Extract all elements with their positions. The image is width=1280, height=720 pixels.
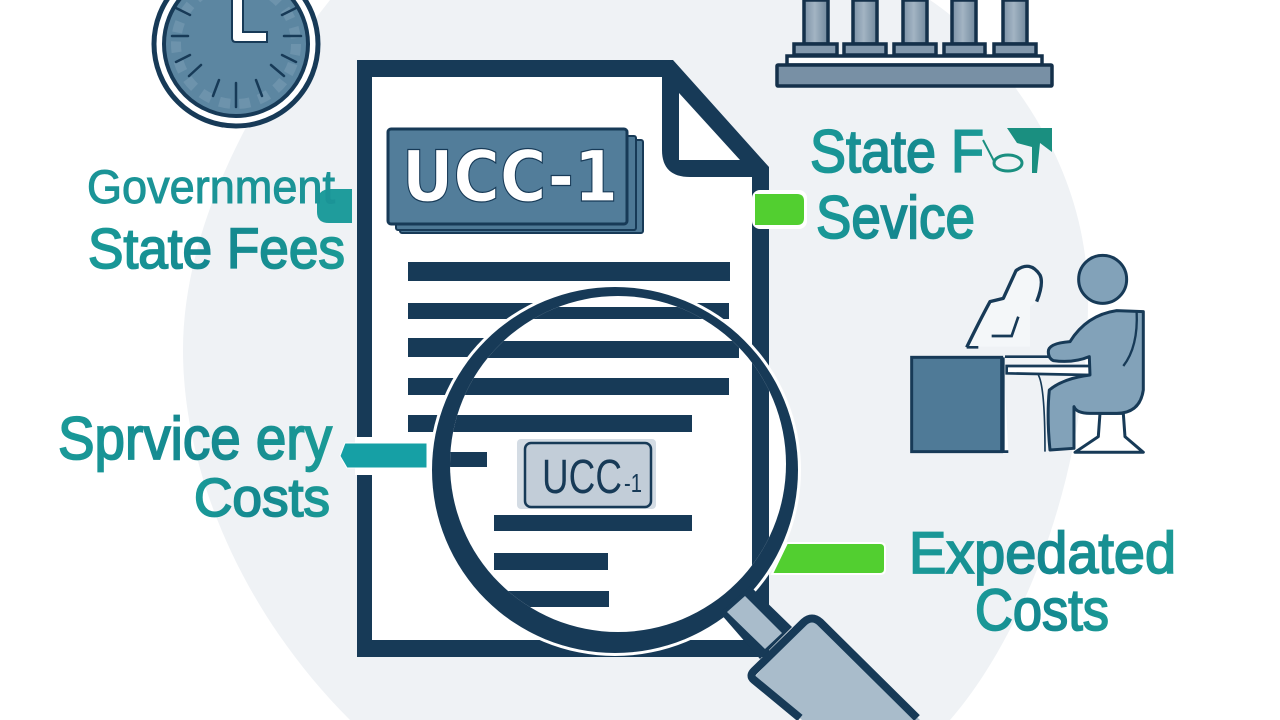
label: service costs bbox=[58, 405, 332, 528]
label: state service: State F bbox=[810, 118, 984, 185]
label: government state fees: State Fees bbox=[88, 217, 345, 281]
label: service costs: Costs bbox=[194, 468, 330, 528]
label: expedited costs bbox=[909, 521, 1176, 643]
handle neck bbox=[720, 586, 792, 659]
mini UCC-1 label bbox=[517, 439, 656, 509]
label: service costs: Sprvice ery bbox=[58, 405, 332, 472]
UCC-1 badge: UCC-1 bbox=[402, 136, 618, 218]
lens content bbox=[450, 307, 769, 607]
icon: courthouse columns bbox=[777, 0, 1052, 86]
text lines bbox=[408, 262, 731, 432]
icon: person at desk bbox=[912, 255, 1143, 452]
label: government state fees bbox=[87, 160, 345, 281]
magnifying glass bbox=[408, 280, 920, 720]
label: expedited costs: Expedated bbox=[909, 521, 1176, 586]
label: government state fees: Government bbox=[87, 160, 335, 213]
label: state service bbox=[810, 118, 1052, 251]
document bbox=[357, 60, 769, 657]
background blob bbox=[183, 0, 1088, 720]
icon: clock bbox=[154, 0, 318, 126]
connector: service delivery costs bbox=[340, 437, 427, 475]
connector: state service bbox=[752, 190, 807, 229]
mini UCC-1 label: -1 bbox=[624, 468, 642, 498]
handle grip bbox=[752, 618, 920, 720]
connector: government state fees bbox=[317, 189, 352, 223]
label: expedited costs: Costs bbox=[975, 578, 1109, 643]
mini UCC-1 label: UCC bbox=[542, 451, 622, 504]
label: state service: Sevice bbox=[816, 184, 975, 251]
connector: expedited costs bbox=[772, 543, 885, 574]
